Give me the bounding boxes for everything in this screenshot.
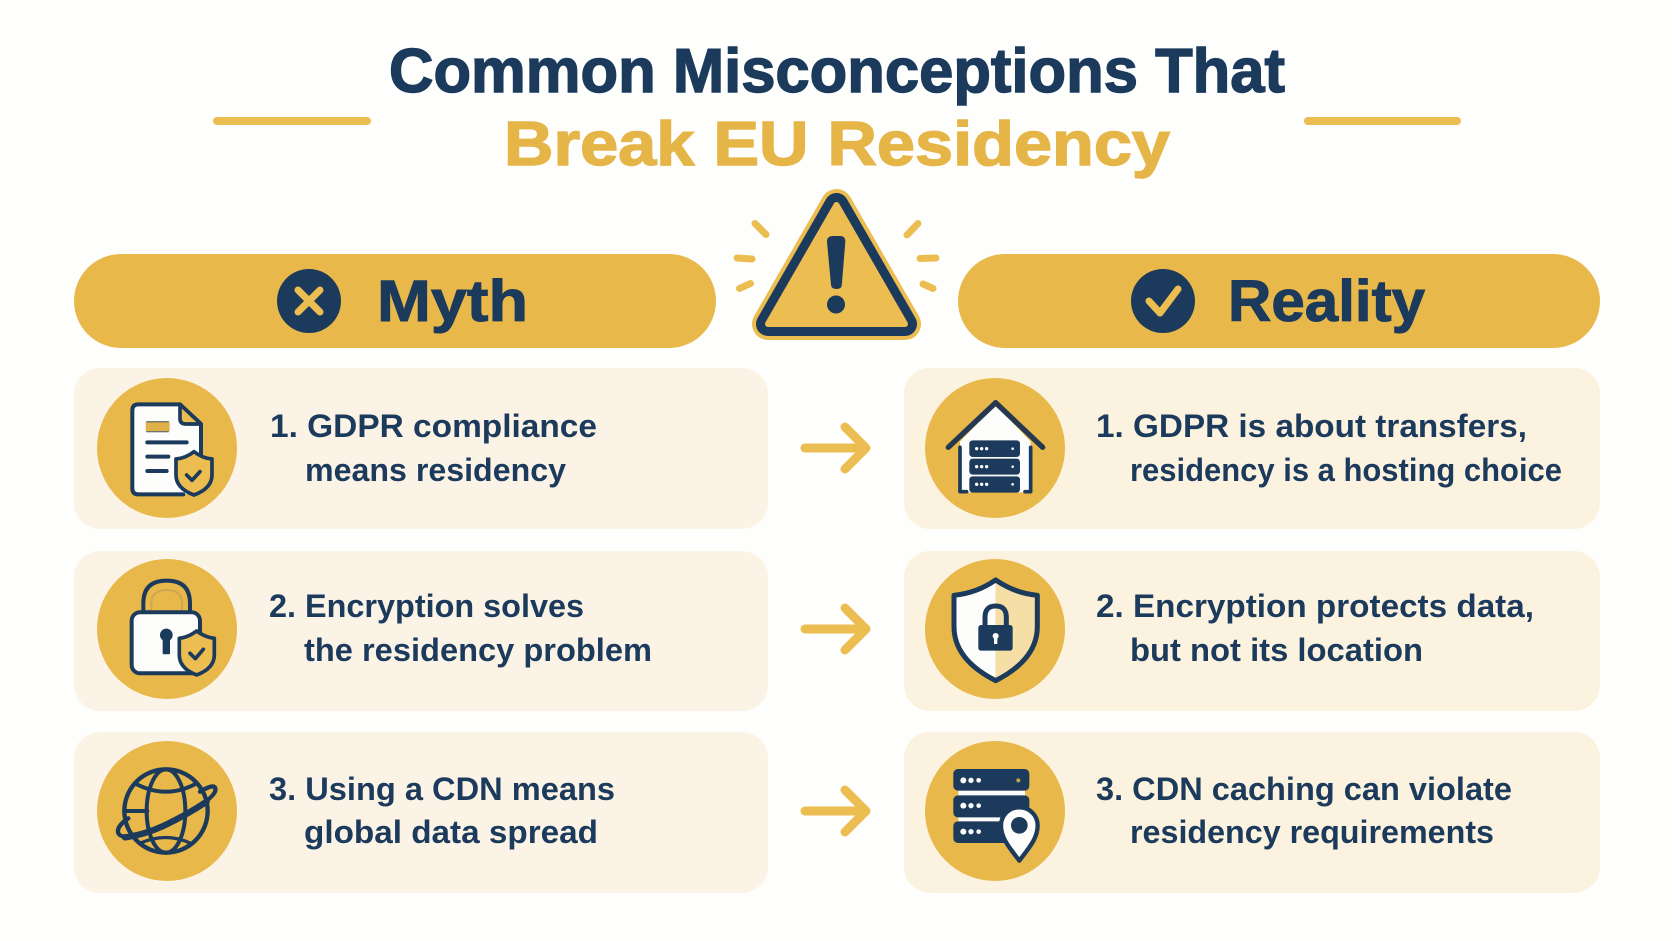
panel: reality 2: [904, 551, 1600, 711]
arrow: row 3: [805, 790, 866, 832]
panel: myth 3: 3. Using a CDN means: [269, 771, 615, 807]
panel: reality header: Reality: [1228, 269, 1425, 334]
icon: check: [1131, 269, 1195, 333]
panel: reality header: [958, 254, 1600, 348]
icon: shield with padlock: [954, 580, 1037, 681]
panel: myth 2: [74, 551, 768, 711]
icon: cross: [277, 269, 341, 333]
icon: house with servers: [948, 403, 1043, 493]
icon: servers with location pin: [953, 769, 1038, 861]
icon: globe with orbit: [118, 769, 215, 853]
panel: reality 2: but not its location: [1130, 632, 1423, 668]
arrow: row 2: [805, 608, 866, 650]
title: Break EU Residency: [504, 110, 1171, 179]
title: [389, 37, 1285, 179]
panel: reality 3: [904, 732, 1600, 893]
icon: document with shield: [132, 404, 212, 495]
panel: reality 2: 2. Encryption protects data,: [1096, 588, 1534, 624]
panel: reality 1: residency is a hosting choice: [1130, 452, 1562, 488]
panel: myth header: [74, 254, 716, 348]
title: Common Misconceptions That: [389, 37, 1285, 106]
panel: reality 3: 3. CDN caching can violate: [1096, 771, 1512, 807]
panel: myth 2: the residency problem: [304, 632, 652, 668]
icon: warning triangle: [737, 205, 936, 324]
panel: myth 1: 1. GDPR compliance: [270, 408, 597, 444]
panel: myth 3: global data spread: [304, 814, 598, 850]
panel: myth 2: 2. Encryption solves: [269, 588, 584, 624]
panel: myth header: Myth: [377, 269, 528, 334]
panel: reality 3: residency requirements: [1130, 814, 1494, 850]
panel: reality 1: 1. GDPR is about transfers,: [1096, 408, 1527, 444]
panel: myth 1: means residency: [305, 452, 566, 488]
icon: padlock with shield: [132, 581, 214, 675]
panel: myth 3: [74, 732, 768, 893]
panel: reality 1: [904, 368, 1600, 529]
arrow: row 1: [805, 427, 866, 469]
panel: myth 1: [74, 368, 768, 529]
